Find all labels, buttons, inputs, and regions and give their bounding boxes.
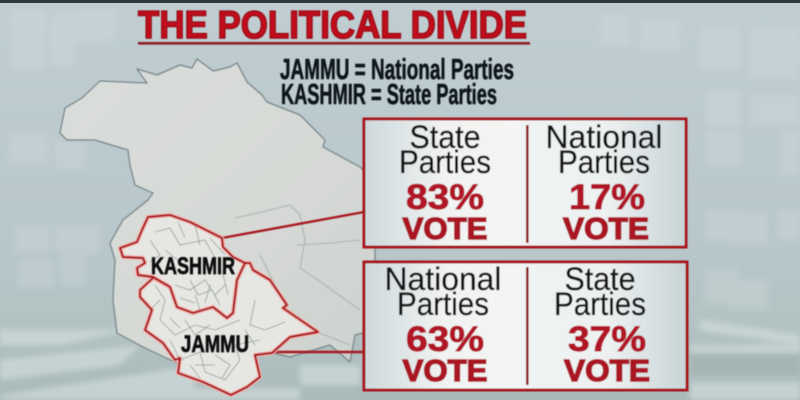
State Parties 37%: 37% <box>568 320 646 359</box>
State Parties 83%: State <box>410 119 480 155</box>
State Parties 83% <box>399 119 491 246</box>
map label: Kashmir: KASHMIR <box>151 253 235 280</box>
legend text: JAMMU = National Parties <box>280 54 514 86</box>
State Parties 37% <box>554 261 650 388</box>
legend text: KASHMIR = State Parties <box>281 79 497 111</box>
map: outer region <box>60 59 375 363</box>
region: Kashmir <box>120 215 245 318</box>
National Parties 63%: Parties <box>397 286 489 322</box>
connector lines <box>222 212 364 352</box>
region: Jammu <box>140 263 318 395</box>
National Parties 17%: National <box>546 119 662 155</box>
district lines <box>150 222 285 380</box>
National Parties 17%: VOTE <box>563 211 649 246</box>
National Parties 63% <box>384 261 502 388</box>
National Parties 63%: National <box>384 261 502 297</box>
map: eastern district lines <box>235 205 360 345</box>
title: THE POLITICAL DIVIDE <box>138 4 527 47</box>
panel: Kashmir vote share <box>364 119 686 247</box>
National Parties 17% <box>546 119 662 246</box>
State Parties 83%: 83% <box>406 178 484 217</box>
State Parties 83%: VOTE <box>402 211 488 246</box>
National Parties 63%: 63% <box>406 320 484 359</box>
State Parties 37%: State <box>564 261 636 297</box>
State Parties 83%: Parties <box>399 144 491 180</box>
National Parties 17%: Parties <box>558 144 650 180</box>
map: Kashmir and Jammu regions <box>120 215 318 395</box>
panel: Jammu vote share <box>364 261 687 390</box>
National Parties 63%: VOTE <box>402 353 488 388</box>
National Parties 17%: 17% <box>569 178 645 217</box>
State Parties 37%: Parties <box>554 286 646 322</box>
legend text <box>280 54 514 111</box>
map label: Jammu: JAMMU <box>181 331 249 358</box>
State Parties 37%: VOTE <box>564 353 650 388</box>
